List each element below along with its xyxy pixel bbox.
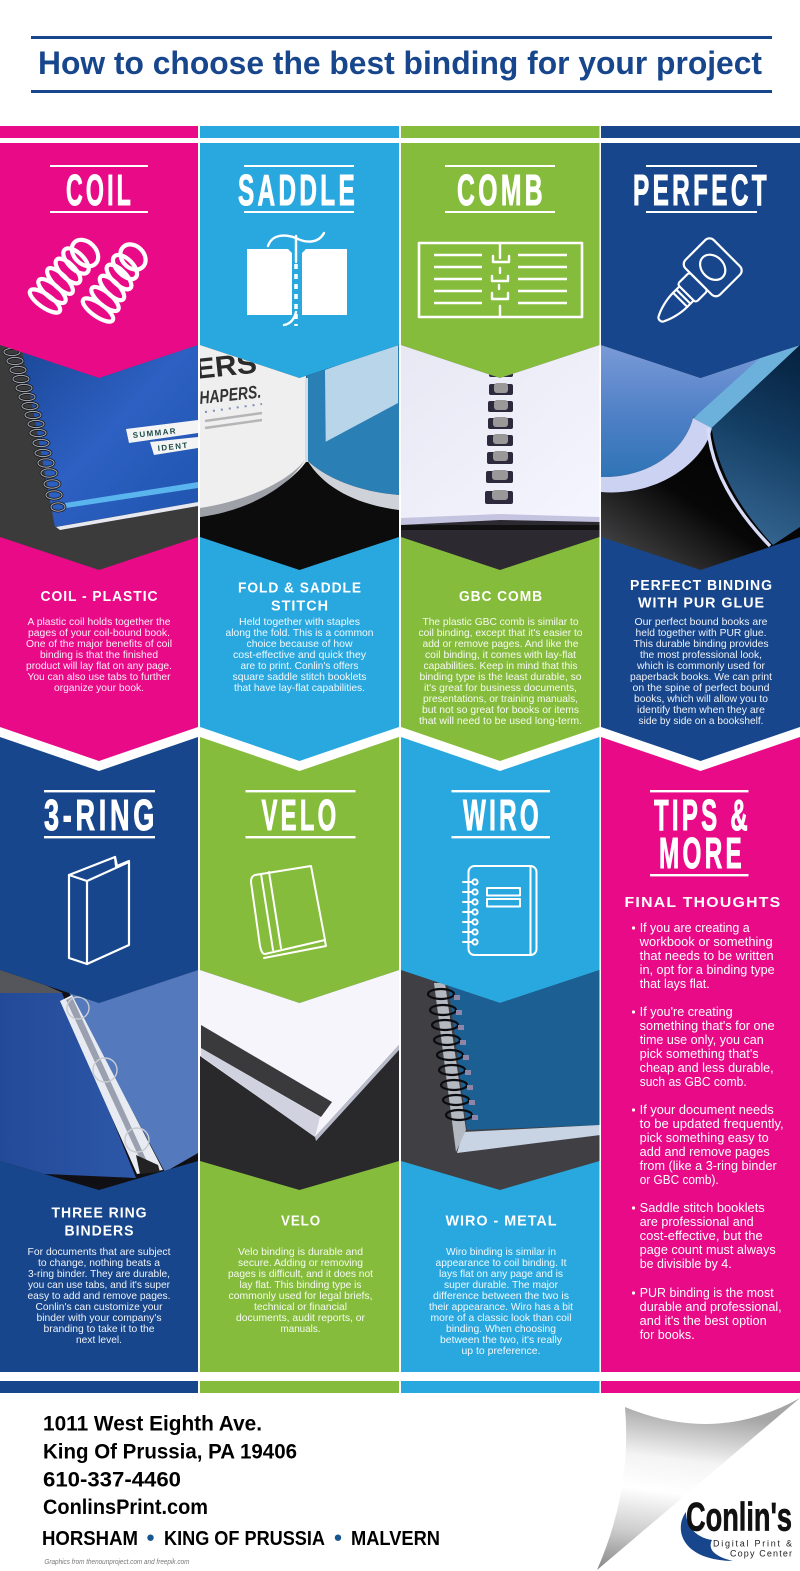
- text: velo description: Velo binding is durable and: [238, 1247, 363, 1258]
- text: wiro description: [429, 1247, 573, 1357]
- text: wiro description: Wiro binding is similar in: [446, 1247, 556, 1258]
- text: 3-ring description: you can use tabs, and it's super: [28, 1280, 171, 1291]
- photo: coil bound book: [0, 335, 198, 570]
- text: wiro description: up to preference.: [462, 1346, 540, 1357]
- panel: saddle: [193, 143, 399, 761]
- tip: saddle stitch: are professional and: [640, 1215, 754, 1229]
- tip: saddle stitch: Saddle stitch booklets: [640, 1201, 765, 1215]
- icon: glue bottle: [642, 236, 744, 338]
- tip: PUR binding: PUR binding is the most: [640, 1286, 774, 1300]
- heading: velo: [246, 790, 356, 840]
- tip: frequent updates: pick something easy to: [640, 1131, 769, 1145]
- bottom colour strip: [0, 1381, 800, 1393]
- text: comb description: it's great for business documents,: [424, 683, 577, 694]
- tip: PUR binding: [632, 1286, 782, 1342]
- text: perfect description: the most professional look,: [640, 650, 762, 661]
- heading: wiro: [452, 790, 550, 840]
- text: perfect description: side by side on a bookshelf.: [638, 716, 764, 727]
- text: wiro description: appearance to coil binding. It: [436, 1258, 567, 1269]
- top colour strip: [0, 126, 800, 138]
- panel: perfect: [601, 143, 800, 761]
- heading: 3-ring: [44, 790, 158, 840]
- tip: PUR binding: and it's the best option: [640, 1314, 767, 1328]
- tip: frequent updates: to be updated frequently,: [640, 1117, 784, 1131]
- heading: 3-ring: 3-RING: [44, 791, 158, 840]
- text: saddle description: cost-effective and quick they: [233, 650, 367, 661]
- text: saddle description: are to print. Conlin's offers: [240, 661, 358, 672]
- text: saddle description: square saddle stitch booklets: [232, 672, 366, 683]
- icon: velo book: [251, 866, 326, 958]
- text: velo description: secure. Adding or removing: [238, 1258, 363, 1269]
- heading: velo: VELO: [281, 1214, 321, 1230]
- icon: binder: [69, 857, 129, 964]
- tip: one time use: If you're creating: [640, 1005, 733, 1019]
- text: 3-ring description: [28, 1247, 171, 1346]
- tip: one time use: [632, 1005, 775, 1089]
- heading: three ring binders: THREE RING: [52, 1206, 148, 1222]
- text: comb description: but not so great for books or items: [422, 705, 579, 716]
- tip: saddle stitch: be divisible by 4.: [640, 1257, 732, 1271]
- text: velo description: lay flat. This binding type is: [240, 1280, 362, 1291]
- photo: saddle stitched booklet: ERS: [193, 348, 258, 386]
- contact details: ConlinsPrint.com: [43, 1495, 208, 1519]
- title: How to choose the best binding for your project: [38, 45, 762, 81]
- text: wiro description: between the two, it's really: [440, 1335, 563, 1346]
- text: wiro description: more of a classic look than coil: [430, 1313, 572, 1324]
- heading: final thoughts: FINAL THOUGHTS: [624, 894, 782, 911]
- contact details: 610-337-4460: [43, 1468, 181, 1492]
- tip: saddle stitch: page count must always: [640, 1243, 776, 1257]
- tip: one time use: pick something that's: [640, 1047, 759, 1061]
- photo: saddle stitched booklet: HAPERS.: [198, 382, 262, 408]
- panel: coil: [0, 143, 198, 761]
- text: velo description: pages is difficult, and it does not: [228, 1269, 373, 1280]
- text: comb description: presentations, or training manuals,: [423, 694, 578, 705]
- logo: Conlin's: Digital Print &: [713, 1539, 792, 1549]
- logo: Conlin's: Copy Center: [730, 1549, 792, 1559]
- text: coil description: A plastic coil holds together the: [28, 617, 171, 628]
- text: saddle description: [226, 617, 374, 694]
- text: comb description: binding type is the least durable, so: [420, 672, 582, 683]
- heading: fold and saddle stitch: FOLD & SADDLE: [238, 580, 362, 596]
- photo: wiro bound book: [401, 960, 600, 1190]
- tip: lay flat: that lays flat.: [640, 977, 710, 991]
- text: perfect description: This durable binding provides: [634, 639, 768, 650]
- locations: [42, 1528, 440, 1550]
- tip: lay flat: If you are creating a: [640, 921, 750, 935]
- text: perfect description: paperback books. We can print: [630, 672, 772, 683]
- text: 3-ring description: binder with your company's: [36, 1313, 162, 1324]
- locations: HORSHAM: [42, 1528, 138, 1550]
- icon: coil springs: [27, 235, 151, 326]
- text: wiro description: difference between the two is: [433, 1291, 569, 1302]
- panel: wiro: [401, 737, 600, 1372]
- photo: comb bound pages: [401, 345, 600, 570]
- text: comb description: that will need to be used long-term.: [419, 716, 582, 727]
- photo: coil bound book: SUMMAR: [132, 426, 177, 440]
- text: coil description: pages of your coil-bound book.: [28, 628, 170, 639]
- tip: lay flat: [632, 921, 775, 991]
- photo: coil bound book: IDENT: [157, 441, 189, 453]
- text: comb description: [418, 617, 583, 727]
- heading: tips and more: [650, 790, 751, 878]
- logo: Conlin's: [681, 1496, 792, 1561]
- text: velo description: technical or financial: [254, 1302, 347, 1313]
- tip: saddle stitch: cost-effective, but the: [640, 1229, 763, 1243]
- heading: three ring binders: [52, 1206, 148, 1240]
- panel: 3-ring: [0, 737, 198, 1372]
- text: 3-ring description: to change, nothing beats a: [38, 1258, 160, 1269]
- text: 3-ring description: Conlin's can customize your: [36, 1302, 163, 1313]
- tip: frequent updates: add and remove pages: [640, 1145, 770, 1159]
- page curl: [597, 1398, 800, 1570]
- contact details: 1011 West Eighth Ave.: [43, 1412, 262, 1436]
- text: velo description: manuals.: [280, 1324, 320, 1335]
- locations: MALVERN: [351, 1528, 440, 1550]
- heading: perfect binding: [630, 578, 773, 612]
- tip: PUR binding: for books.: [640, 1328, 695, 1342]
- icon: saddle stitch: [247, 233, 347, 326]
- tip: one time use: cheap and less durable,: [640, 1061, 774, 1075]
- tip: frequent updates: from (like a 3-ring binder: [640, 1159, 777, 1173]
- text: velo description: documents, audit reports, or: [236, 1313, 366, 1324]
- heading: coil: [50, 165, 148, 215]
- heading: wiro: WIRO: [463, 791, 542, 840]
- graphics credit: Graphics from thenounproject.com and freepik.com: [44, 1557, 189, 1566]
- text: wiro description: super durable. The major: [444, 1280, 559, 1291]
- heading: perfect binding: PERFECT BINDING: [630, 578, 773, 594]
- contact details: King Of Prussia, PA 19406: [43, 1440, 297, 1464]
- text: saddle description: that have lay-flat capabilities.: [234, 683, 365, 694]
- heading: saddle: [238, 165, 358, 215]
- tip: frequent updates: If your document needs: [640, 1103, 774, 1117]
- text: comb description: coil binding, except that it's easier to: [418, 628, 583, 639]
- text: 3-ring description: easy to add and remove pages.: [28, 1291, 170, 1302]
- text: coil description: You can also use tabs to further: [28, 672, 171, 683]
- text: saddle description: choice because of how: [246, 639, 353, 650]
- text: coil description: product will lay flat on any page.: [26, 661, 172, 672]
- text: wiro description: lays flat on any page and is: [439, 1269, 563, 1280]
- heading: fold and saddle stitch: STITCH: [271, 599, 329, 615]
- heading: three ring binders: BINDERS: [64, 1224, 134, 1240]
- text: 3-ring description: branding to take it to the: [44, 1324, 155, 1335]
- text: perfect description: Our perfect bound books are: [634, 617, 768, 628]
- tip: one time use: time use only, you can: [640, 1033, 764, 1047]
- text: perfect description: books, which will allow you to: [634, 694, 768, 705]
- text: coil description: organize your book.: [54, 683, 144, 694]
- text: comb description: coil binding, it comes with lay-flat: [425, 650, 576, 661]
- tip: one time use: something that's for one: [640, 1019, 775, 1033]
- heading: coil plastic: COIL - PLASTIC: [40, 589, 158, 605]
- text: wiro description: binding. When choosing: [446, 1324, 556, 1335]
- text: coil description: [26, 617, 172, 694]
- text: perfect description: which is commonly used for: [636, 661, 766, 672]
- text: comb description: The plastic GBC comb is similar to: [422, 617, 579, 628]
- tip: lay flat: in, opt for a binding type: [640, 963, 775, 977]
- text: coil description: binding is that the finished: [40, 650, 158, 661]
- photo: ring binder: [0, 960, 198, 1190]
- text: perfect description: [630, 617, 772, 727]
- heading: fold and saddle stitch: [238, 580, 362, 615]
- panel: velo: [200, 737, 399, 1372]
- tip: frequent updates: or GBC comb).: [640, 1173, 719, 1187]
- contact details: [43, 1412, 297, 1519]
- tip: frequent updates: [632, 1103, 784, 1187]
- panel: tips and more: [601, 737, 800, 1372]
- logo swoosh: [681, 1512, 733, 1561]
- text: perfect description: identify them when they are: [637, 705, 765, 716]
- text: comb description: add or remove pages. And like the: [422, 639, 579, 650]
- text: saddle description: along the fold. This is a common: [226, 628, 374, 639]
- text: 3-ring description: For documents that are subject: [28, 1247, 171, 1258]
- tip: PUR binding: durable and professional,: [640, 1300, 782, 1314]
- heading: perfect binding: WITH PUR GLUE: [638, 596, 765, 612]
- text: comb description: capabilities. Keep in mind that this: [424, 661, 578, 672]
- text: wiro description: their appearance. Wiro has a bit: [429, 1302, 573, 1313]
- text: perfect description: held together with PUR glue.: [636, 628, 766, 639]
- heading: velo: VELO: [262, 791, 340, 840]
- text: saddle description: Held together with staples: [239, 617, 360, 628]
- heading: comb: [445, 165, 555, 215]
- tip: one time use: such as GBC comb.: [640, 1075, 747, 1089]
- locations: KING OF PRUSSIA: [164, 1528, 325, 1550]
- text: coil description: One of the major benefits of coil: [26, 639, 172, 650]
- panel: comb: [401, 143, 600, 761]
- heading: coil: COIL: [66, 166, 134, 215]
- text: perfect description: on the spine of perfect bound: [632, 683, 770, 694]
- text: 3-ring description: next level.: [76, 1335, 122, 1346]
- icon: comb binding: [419, 243, 582, 317]
- photo: velo bound document: [200, 960, 399, 1190]
- tip: lay flat: workbook or something: [639, 935, 773, 949]
- photo: perfect bound book: [601, 340, 800, 570]
- icon: wiro notebook: [463, 866, 536, 955]
- heading: saddle: SADDLE: [238, 166, 358, 215]
- text: 3-ring description: 3-ring binder. They are durable,: [28, 1269, 170, 1280]
- photo: saddle stitched booklet: [193, 343, 399, 570]
- tip: saddle stitch: [632, 1201, 776, 1271]
- text: velo description: [228, 1247, 373, 1335]
- heading: wiro metal: WIRO - METAL: [446, 1214, 558, 1230]
- title: [31, 36, 772, 93]
- tip: lay flat: that needs to be written: [640, 949, 774, 963]
- text: velo description: commonly used for legal briefs,: [228, 1291, 372, 1302]
- heading: comb: COMB: [457, 166, 546, 215]
- heading: gbc comb: GBC COMB: [459, 589, 543, 605]
